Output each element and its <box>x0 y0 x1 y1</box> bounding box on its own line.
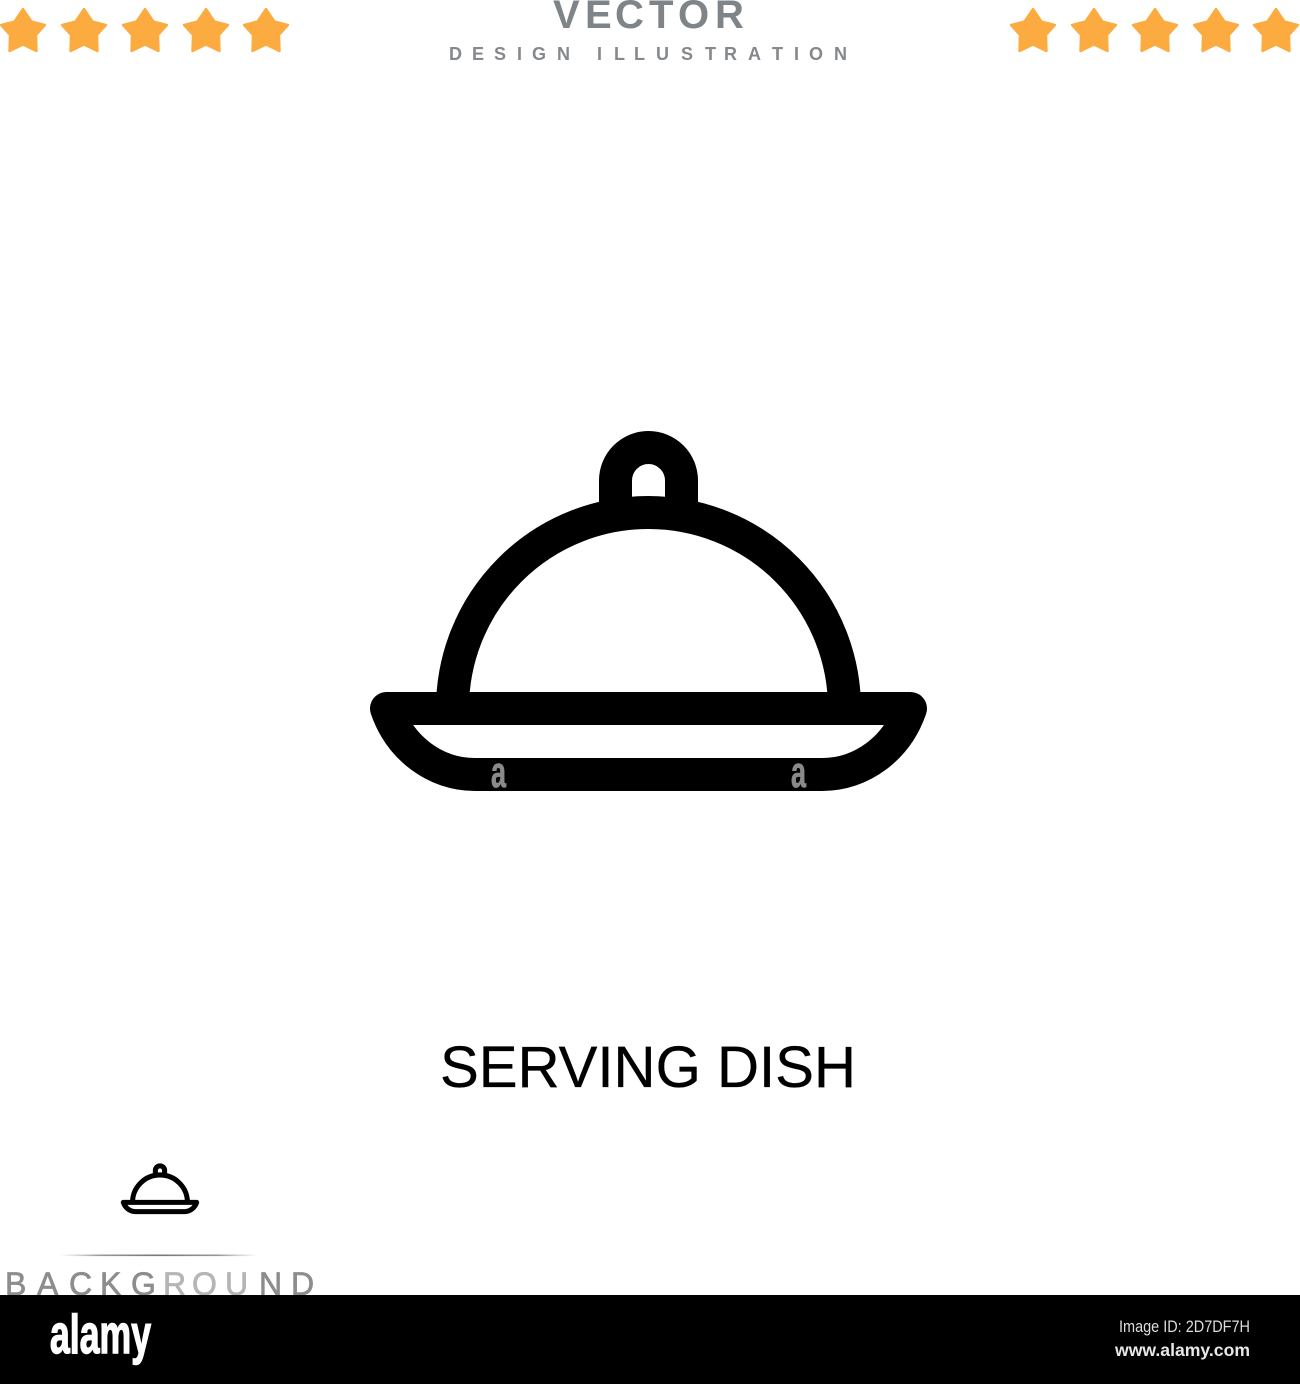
website url: www.alamy.com <box>1114 1340 1250 1360</box>
left star rating <box>1 9 288 51</box>
watermark letter left: a <box>491 748 506 797</box>
icon part: plate <box>386 708 910 774</box>
image id: Image ID: 2D7DF7H <box>1119 1318 1250 1336</box>
icon part: cloche handle <box>616 448 682 508</box>
right star rating <box>1011 9 1298 51</box>
icon: serving dish large <box>386 448 910 774</box>
icon part: cloche dome <box>452 512 844 708</box>
icon: serving dish small <box>123 1166 197 1212</box>
thin fading line <box>60 1254 258 1256</box>
subheading: design illustration: DESIGN ILLUSTRATION <box>449 44 847 64</box>
background label: ND <box>259 1266 314 1302</box>
title: serving dish: SERVING DISH <box>440 1035 856 1100</box>
background label: ROU <box>163 1266 248 1302</box>
black footer bar <box>0 1295 1300 1384</box>
alamy logo: alamy <box>50 1303 151 1365</box>
watermark letter right: a <box>791 748 806 797</box>
background label: BACKG <box>5 1266 156 1302</box>
